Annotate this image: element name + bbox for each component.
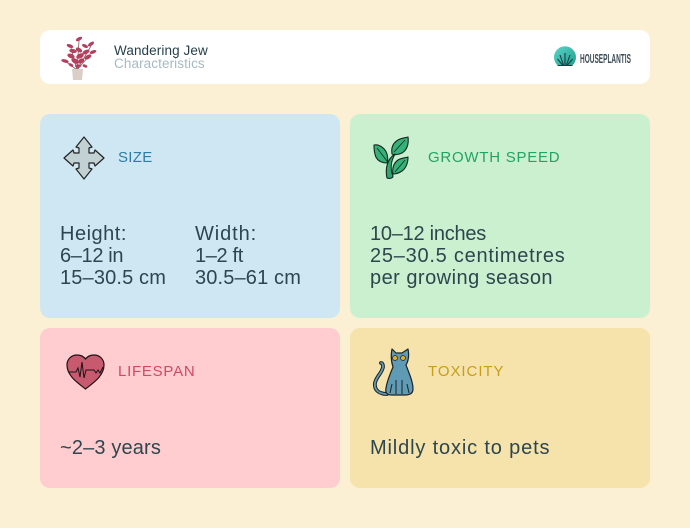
text: width: 30.5–61 cm bbox=[195, 267, 301, 289]
text: width bbox=[195, 223, 301, 289]
heading: GROWTH SPEED bbox=[428, 149, 560, 166]
icon: logo mark bbox=[554, 46, 576, 66]
icon: leaves bbox=[373, 136, 409, 179]
panel: size bbox=[40, 114, 340, 318]
logo text: HOUSEPLANTIS bbox=[580, 51, 631, 66]
text: height: 6–12 in bbox=[60, 245, 123, 267]
text: height: 15–30.5 cm bbox=[60, 267, 166, 289]
heading: TOXICITY bbox=[428, 363, 504, 380]
text: height bbox=[60, 223, 166, 289]
logo: houseplantis bbox=[554, 46, 631, 66]
text: growth values bbox=[370, 223, 565, 289]
text: growth values: 25–30.5 centimetres bbox=[370, 245, 565, 267]
header bar bbox=[40, 30, 650, 84]
text: toxicity value: Mildly toxic to pets bbox=[370, 437, 550, 459]
panel: toxicity bbox=[350, 328, 650, 488]
text: width: Width: bbox=[195, 223, 257, 245]
icon: cat bbox=[372, 348, 414, 396]
panel: growth speed bbox=[350, 114, 650, 318]
icon: potted plant bbox=[61, 36, 96, 80]
text: growth values: per growing season bbox=[370, 267, 553, 289]
heading: LIFESPAN bbox=[118, 363, 195, 380]
text: growth values: 10–12 inches bbox=[370, 223, 486, 245]
heading: SIZE bbox=[118, 149, 153, 166]
title: Wandering Jew bbox=[114, 43, 208, 58]
icon: four-way arrows bbox=[63, 136, 105, 180]
subtitle: Characteristics bbox=[114, 56, 205, 71]
text: width: 1–2 ft bbox=[195, 245, 243, 267]
text: height: Height: bbox=[60, 223, 127, 245]
text: lifespan value: ~2–3 years bbox=[60, 437, 161, 459]
panel: lifespan bbox=[40, 328, 340, 488]
icon: heart with pulse bbox=[66, 354, 105, 390]
